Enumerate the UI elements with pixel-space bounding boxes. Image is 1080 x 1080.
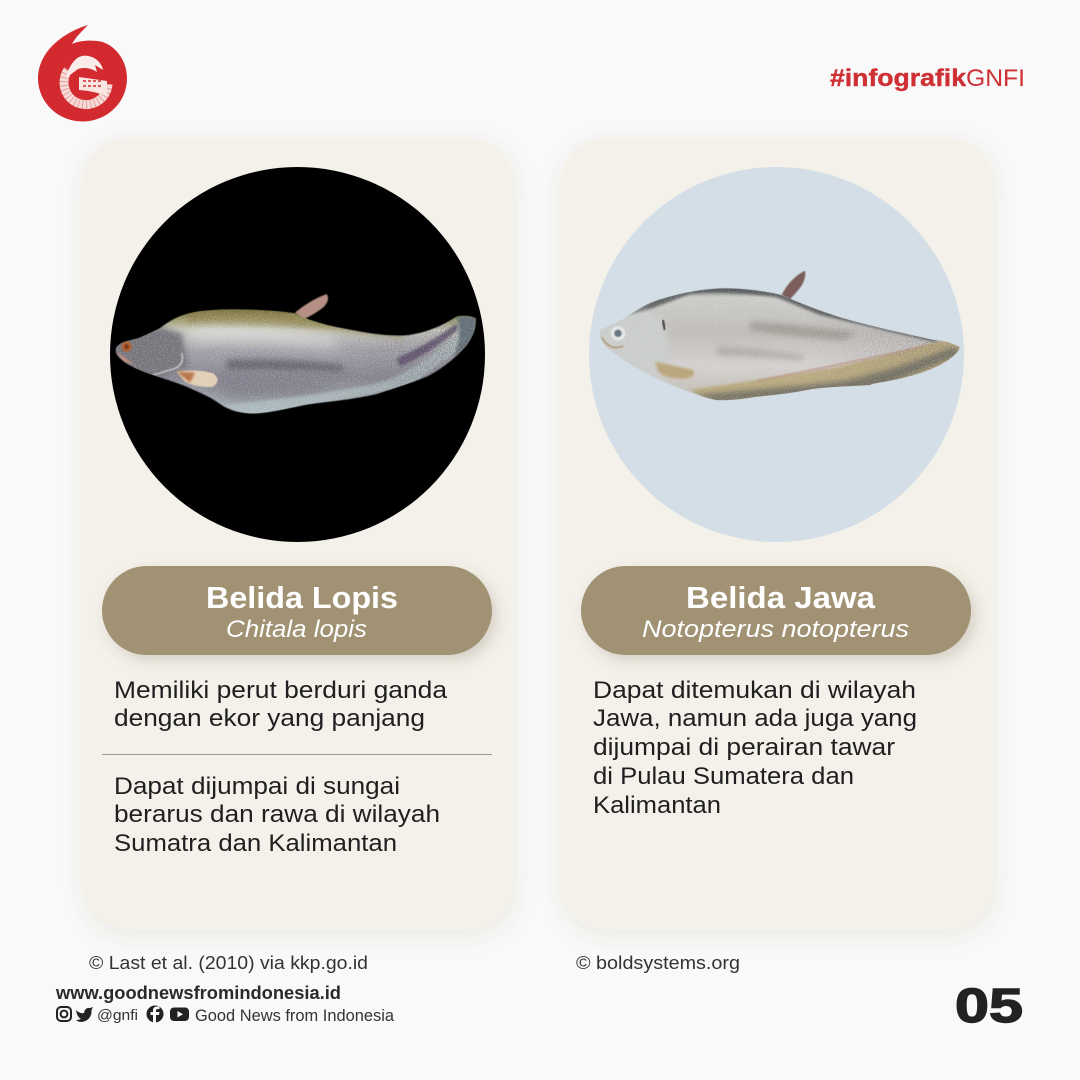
text: characteristics: Memiliki perut berduri ganda <box>114 677 448 704</box>
title pill left: Belida Lopis <box>206 580 398 615</box>
icon: youtube <box>170 1008 189 1021</box>
text: description: Dapat ditemukan di wilayah <box>593 677 916 704</box>
panel: Belida Jawa <box>560 138 994 930</box>
icon: facebook <box>146 1006 164 1023</box>
title pill right <box>581 566 971 655</box>
credit left: © Last et al. (2010) via kkp.go.id <box>89 953 368 973</box>
hashtag: GNFI <box>966 65 1025 92</box>
panel: Belida Lopis <box>82 138 514 930</box>
photo: Belida Jawa on pale blue <box>589 167 965 542</box>
text: characteristics <box>114 677 448 732</box>
icon: twitter <box>76 1007 93 1022</box>
credit right: © boldsystems.org <box>576 953 740 973</box>
panel background right <box>560 138 994 930</box>
hashtag <box>830 65 1025 92</box>
handle: @gnfi <box>97 1007 138 1024</box>
text: habitat: Sumatra dan Kalimantan <box>114 830 397 857</box>
icon: instagram <box>57 1007 71 1021</box>
text: characteristics: dengan ekor yang panjang <box>114 705 425 732</box>
title pill left <box>102 566 492 655</box>
text: description: Kalimantan <box>593 792 721 819</box>
title pill left: Chitala lopis <box>226 616 367 643</box>
text: habitat <box>114 773 440 857</box>
title pill right: Notopterus notopterus <box>642 616 909 643</box>
text: description: dijumpai di perairan tawar <box>593 734 895 761</box>
hashtag: #infografik <box>830 65 967 92</box>
logo: GNFI <box>38 25 127 122</box>
text: description: di Pulau Sumatera dan <box>593 763 854 790</box>
website: www.goodnewsfromindonesia.id <box>55 983 341 1003</box>
social row <box>57 1006 395 1025</box>
text: description <box>593 677 917 819</box>
text: description: Jawa, namun ada juga yang <box>593 705 917 732</box>
title pill right: Belida Jawa <box>686 580 876 615</box>
panel background left <box>82 138 514 930</box>
page number: 05 <box>955 980 1023 1033</box>
channel name: Good News from Indonesia <box>195 1006 395 1025</box>
text: habitat: berarus dan rawa di wilayah <box>114 801 440 828</box>
photo: Belida Lopis on black <box>110 167 485 542</box>
text: habitat: Dapat dijumpai di sungai <box>114 773 400 800</box>
